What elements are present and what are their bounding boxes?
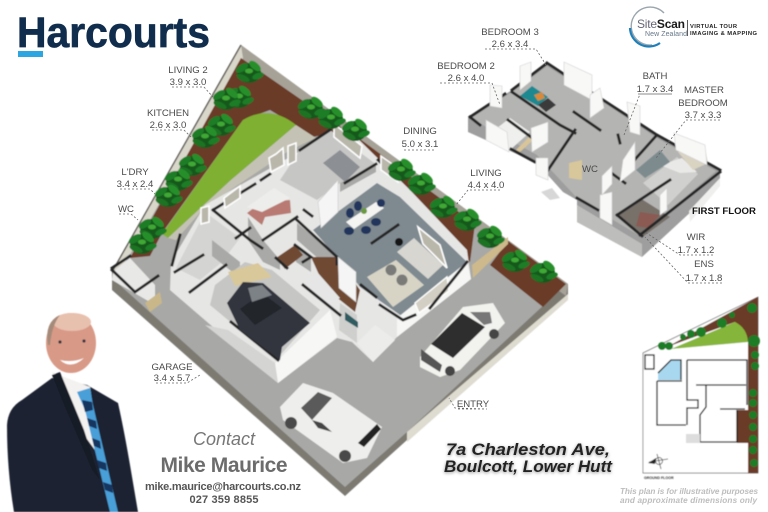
room label: BEDROOM 2: BEDROOM 2	[437, 61, 495, 72]
lawn	[162, 113, 296, 238]
room label: ENTRY: ENTRY	[457, 399, 490, 410]
room label: MASTER BEDROOM: 3.7 x 3.3	[685, 110, 721, 121]
garden bed	[130, 58, 345, 258]
room label: WC first floor: WC	[582, 164, 598, 175]
windows	[201, 124, 447, 268]
garage floor	[210, 262, 320, 360]
room label: KITCHEN: 2.6 x 3.0	[150, 120, 186, 131]
portrait: Mike Maurice	[7, 313, 138, 512]
grey wall faces	[212, 165, 376, 278]
room label: MASTER BEDROOM	[656, 85, 728, 158]
driveway fence	[407, 294, 568, 442]
ground surface	[113, 56, 560, 487]
mini ground floor plan	[643, 297, 760, 480]
room label: ENS	[645, 237, 722, 284]
wc shed	[112, 256, 162, 312]
contact block	[145, 429, 302, 506]
ground floor 3D plan	[112, 45, 568, 496]
room label: BEDROOM 3: BEDROOM 3	[481, 27, 539, 38]
garage exterior wall	[275, 310, 337, 383]
room label: L'DRY: L'DRY	[121, 167, 149, 178]
interior walls	[172, 130, 467, 360]
bedroom 3 bed	[520, 86, 548, 106]
french doors	[318, 180, 338, 228]
disclaimer	[620, 487, 758, 505]
room label: WC: WC	[118, 204, 134, 215]
address: Boulcott, Lower Hutt	[444, 457, 613, 476]
path	[168, 125, 316, 240]
lounge chairs	[323, 150, 360, 182]
contact block: Contact	[193, 429, 256, 449]
bedroom 2 bed	[488, 118, 530, 150]
logo: Harcourts: Harcourts	[17, 9, 210, 57]
dining floor	[313, 183, 467, 317]
room label: BEDROOM 3: 2.6 x 3.4	[492, 39, 529, 50]
rug and sofa	[367, 238, 443, 307]
room label: ENS: ENS	[694, 259, 714, 270]
disclaimer: This plan is for illustrative purposes	[620, 487, 758, 496]
living 2 floor	[280, 130, 377, 200]
room label: BATH	[624, 71, 674, 135]
logo: SiteScan: IMAGING & MAPPING	[690, 31, 757, 37]
room label: MASTER BEDROOM: BEDROOM	[678, 98, 728, 109]
address: 7a Charleston Ave,	[446, 440, 610, 459]
room label: WIR: 1.7 x 1.2	[678, 245, 714, 256]
room label: LIVING 2: LIVING 2	[168, 65, 208, 76]
room label: DINING	[402, 126, 438, 150]
heading: FIRST FLOOR: FIRST FLOOR	[692, 206, 756, 217]
lot base	[112, 45, 568, 496]
room label: BATH: 1.7 x 3.4	[637, 84, 674, 95]
laundry and wc floors	[176, 212, 240, 280]
hallway floor with stairs	[311, 257, 360, 312]
left boundary fence	[113, 45, 243, 270]
first floor walls	[470, 63, 720, 236]
room label: BATH: BATH	[643, 71, 668, 82]
logo: SiteScan: New Zealand	[645, 31, 687, 38]
room label: BEDROOM 3	[481, 27, 546, 65]
room label: BEDROOM 2	[437, 61, 500, 105]
logo: SiteScan	[630, 7, 757, 47]
first floor wc	[569, 160, 582, 180]
compass	[649, 454, 668, 469]
room label: WIR: WIR	[687, 232, 705, 243]
room label: LIVING: 4.4 x 4.0	[468, 180, 504, 191]
plants	[127, 59, 559, 284]
address	[444, 440, 613, 476]
car: white driveway	[420, 303, 505, 377]
logo: SiteScan: VIRTUAL TOUR	[690, 24, 738, 30]
dining table and chairs	[344, 199, 385, 235]
room label: KITCHEN	[147, 108, 191, 137]
white wall strip	[689, 178, 720, 222]
disclaimer: and approximate dimensions only	[620, 496, 757, 505]
house walls base	[170, 126, 471, 383]
room label: L'DRY: 3.4 x 2.4	[117, 179, 154, 190]
room label: DINING: 5.0 x 3.1	[402, 139, 438, 150]
first floor 3D plan	[468, 62, 720, 257]
contact block: mike.maurice@harcourts.co.nz	[145, 481, 302, 493]
entry	[357, 325, 395, 362]
rear fence	[241, 45, 568, 296]
floor	[470, 66, 716, 236]
car: dark garage	[227, 282, 310, 360]
room label: GARAGE: 3.4 x 5.7	[154, 373, 190, 384]
room label: LIVING: LIVING	[470, 168, 502, 179]
room label: LIVING	[456, 168, 504, 205]
room label: WC	[118, 204, 138, 220]
room label: GARAGE: GARAGE	[151, 362, 193, 373]
contact block: Mike Maurice	[160, 454, 288, 477]
room label: KITCHEN: KITCHEN	[147, 108, 189, 119]
room label: DINING: DINING	[403, 126, 437, 137]
room label: LIVING 2: 3.9 x 3.0	[170, 77, 206, 88]
room label: LIVING 2	[168, 65, 213, 97]
picture windows	[415, 277, 449, 313]
kitchen floor	[213, 180, 317, 240]
room label: MASTER BEDROOM: MASTER	[684, 85, 724, 96]
logo: SiteScan: SiteScan	[637, 17, 685, 31]
room label: L'DRY	[117, 167, 155, 194]
room label: GARAGE	[151, 362, 200, 384]
kitchen bench	[247, 200, 291, 225]
car: white front	[280, 383, 382, 463]
timber gate	[472, 237, 508, 278]
room label: WIR	[645, 232, 714, 256]
first floor stair stub	[541, 188, 560, 200]
mini ground floor plan: GROUND FLOOR	[644, 476, 674, 480]
room label: BEDROOM 2: 2.6 x 4.0	[448, 73, 484, 84]
ensuite floor	[617, 198, 670, 236]
first floor windows and doors	[486, 62, 707, 225]
contact block: 027 359 8855	[190, 494, 258, 506]
outer walls	[468, 63, 720, 257]
master bed	[643, 157, 698, 205]
room label: ENS: 1.7 x 1.8	[686, 273, 722, 284]
